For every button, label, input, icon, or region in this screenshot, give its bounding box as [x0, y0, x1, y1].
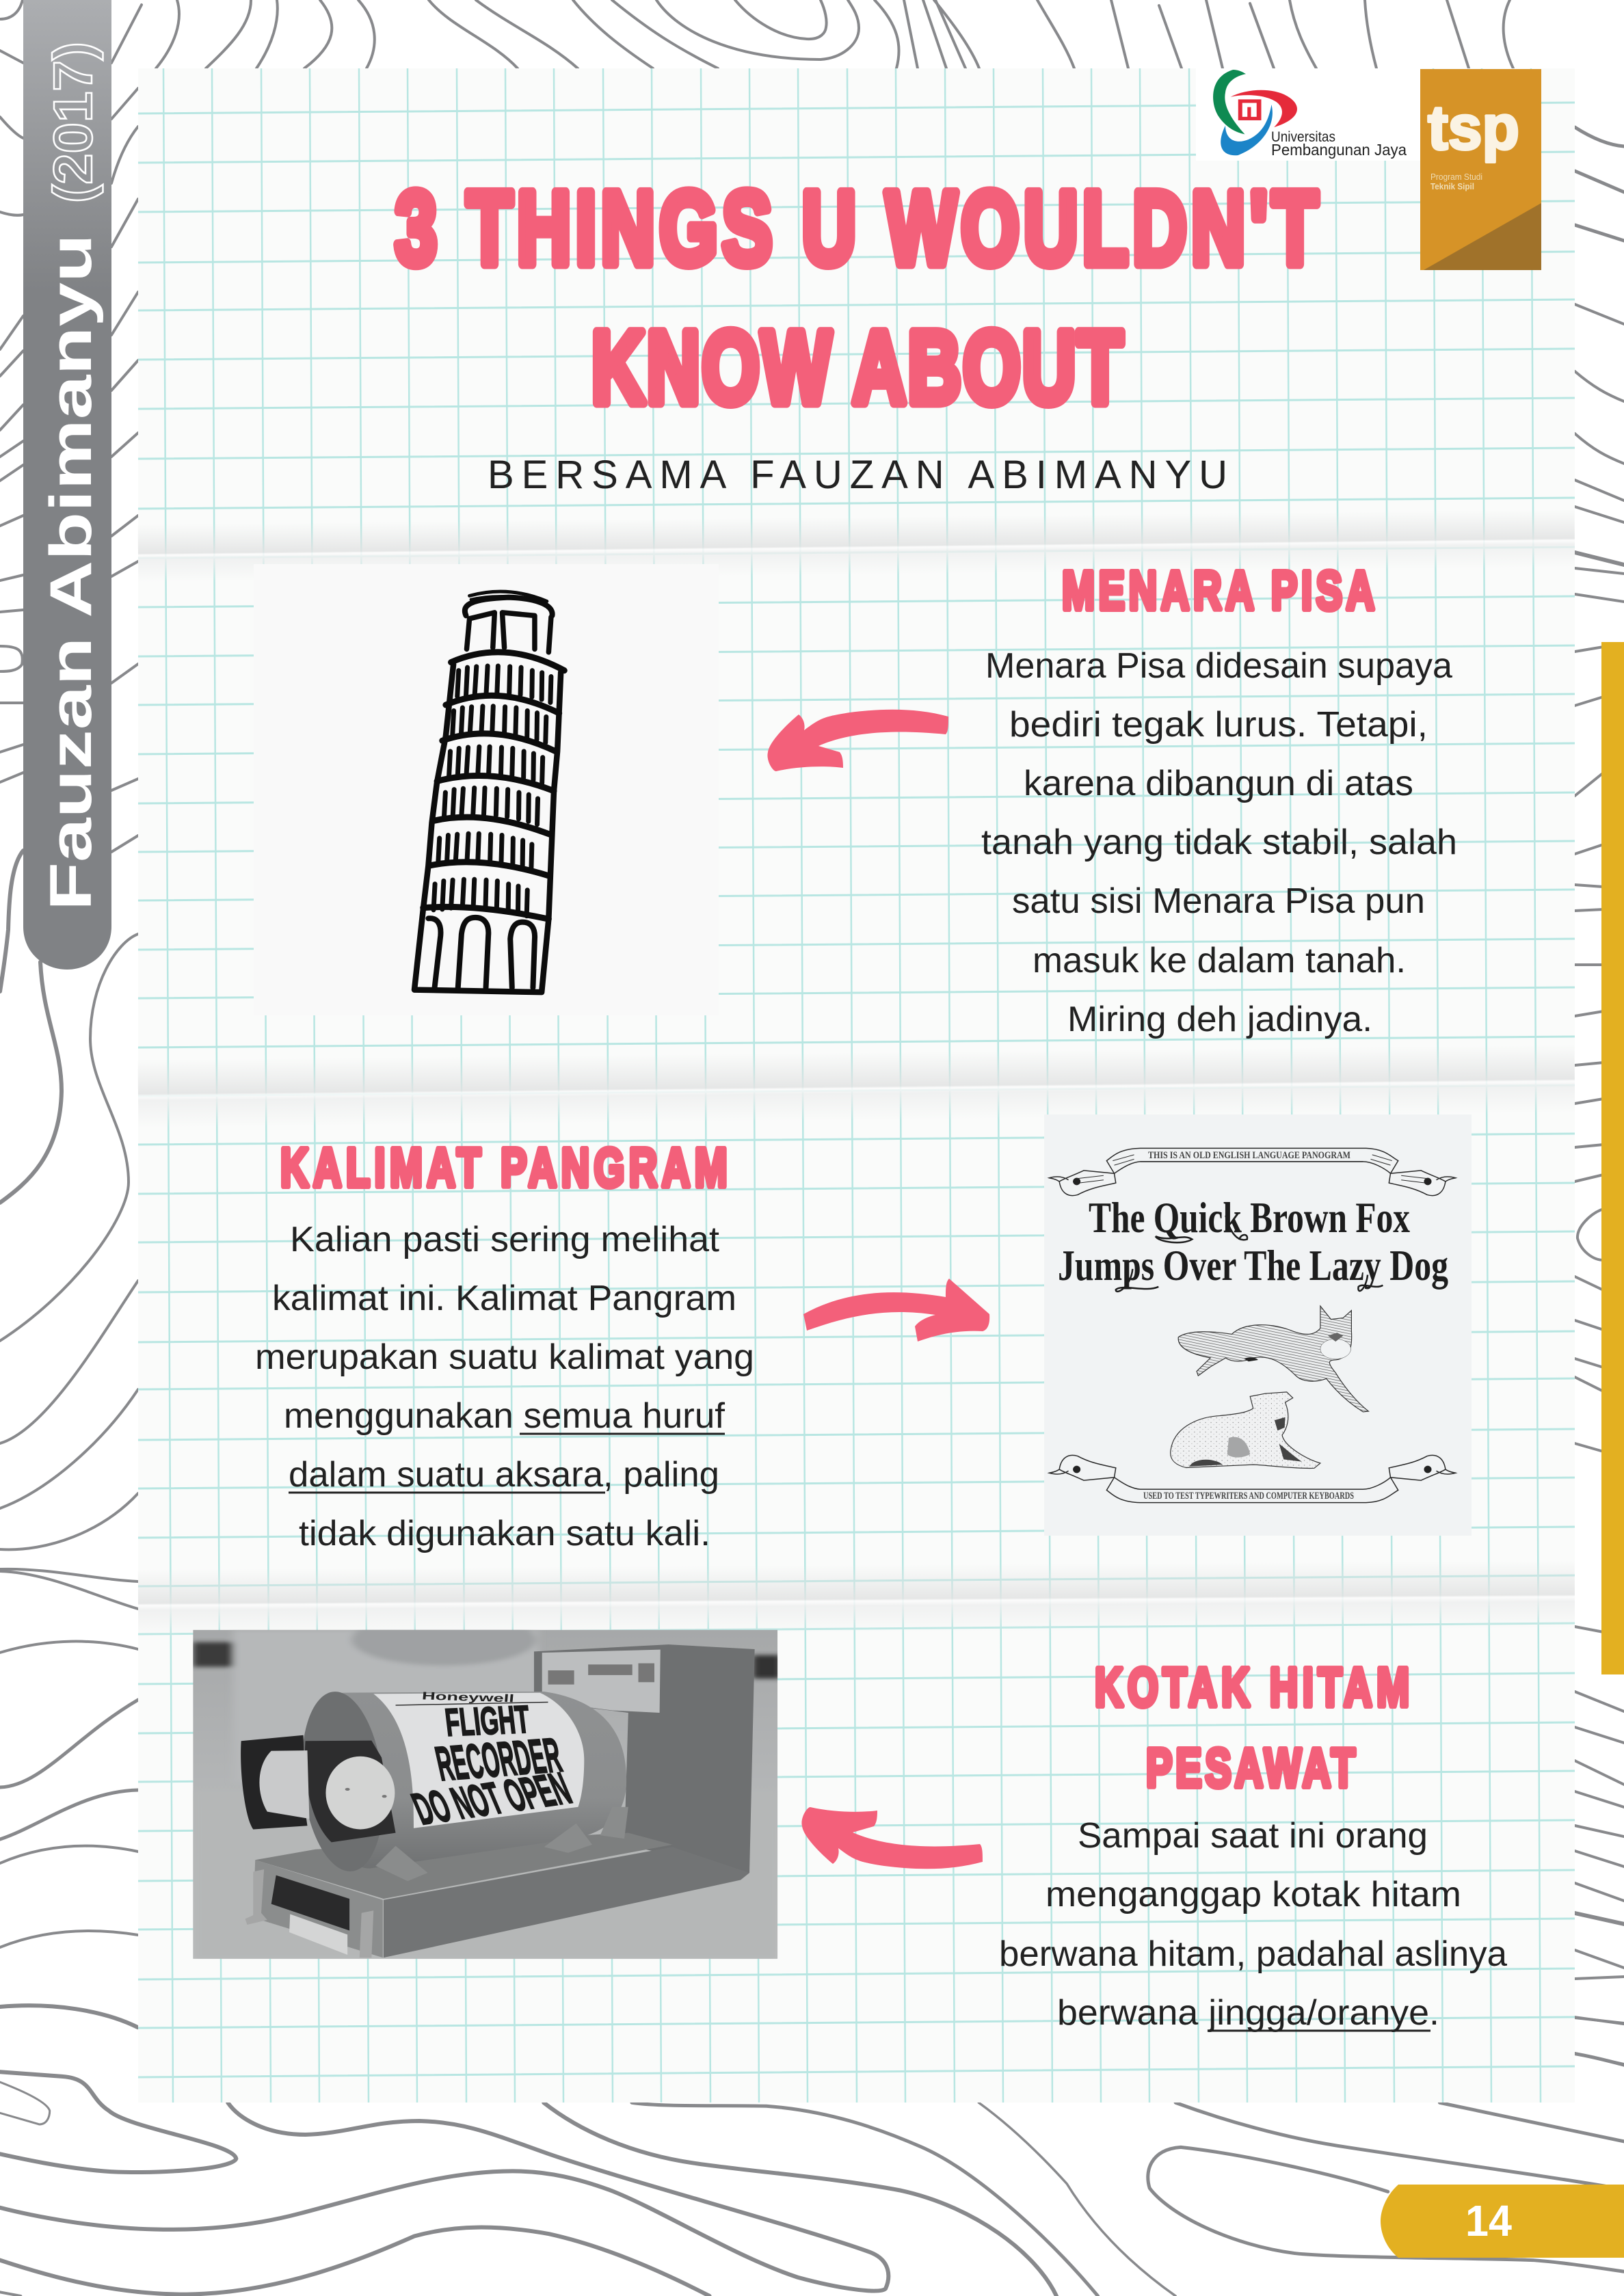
text: Menara Pisa: Menara Pisa didesain supaya [985, 646, 1452, 686]
text: Kalimat Pangram: tidak digunakan satu kali. [299, 1514, 710, 1553]
text: Kalimat Pangram: merupakan suatu kalimat yang [255, 1337, 754, 1377]
program studi: Program Studi [1430, 172, 1482, 182]
dog engraving [1171, 1392, 1320, 1469]
subtitle: BERSAMA FAUZAN ABIMANYU [488, 453, 1227, 497]
heading: Kalimat Pangram: KALIMAT PANGRAM [280, 1137, 728, 1198]
panel: flight recorder photo: DO NOT OPEN [405, 1763, 578, 1834]
heading: Menara Pisa: MENARA PISA [1062, 560, 1374, 621]
page number badge [1381, 2185, 1624, 2258]
ribbon text top: THIS IS AN OLD ENGLISH LANGUAGE PANOGRAM [1148, 1150, 1350, 1161]
teknik sipil: Teknik Sipil [1430, 181, 1474, 191]
text: Menara Pisa: bediri tegak lurus. Tetapi, [1009, 705, 1428, 745]
ribbon text bottom: USED TO TEST TYPEWRITERS AND COMPUTER KEYBOARDS [1143, 1491, 1354, 1501]
title: KNOW ABOUT [591, 310, 1123, 425]
yellow side bar [1601, 642, 1624, 1674]
text: Menara Pisa: karena dibangun di atas [1024, 764, 1413, 803]
heading: Kotak Hitam Pesawat: KOTAK HITAM [1095, 1657, 1409, 1718]
heading: Kotak Hitam Pesawat: PESAWAT [1146, 1737, 1355, 1798]
title: 3 THINGS U WOULDN'T [395, 170, 1318, 286]
text: Menara Pisa: Miring deh jadinya. [1067, 1000, 1372, 1039]
title [395, 170, 1318, 425]
panel: flight recorder photo [193, 1614, 781, 1960]
text: Kotak Hitam Pesawat: berwana hitam, padahal aslinya [999, 1934, 1507, 1974]
page number: 14 [1465, 2196, 1512, 2245]
recorder base [255, 1833, 672, 1899]
recorder label [373, 1693, 584, 1828]
recorder back box [534, 1644, 755, 1873]
tsp wordmark: tsp [1428, 93, 1519, 163]
logo text line 2: Pembangunan Jaya [1271, 141, 1407, 159]
fox engraving [1178, 1306, 1368, 1412]
sidebar year: (2017) [42, 42, 103, 203]
logo: TSP program badge [1420, 69, 1541, 270]
recorder cylinder [342, 1692, 626, 1868]
panel: flight recorder photo: RECORDER [431, 1728, 566, 1791]
text: Kalimat Pangram: Kalian pasti sering melihat [290, 1220, 720, 1259]
text: Kotak Hitam Pesawat [999, 1816, 1507, 2033]
recorder end cap [241, 1735, 307, 1829]
arrow: Kalimat Pangram pointing right [803, 1279, 989, 1341]
heading: Kotak Hitam Pesawat [1095, 1657, 1409, 1798]
text: Kalimat Pangram: dalam suatu aksara, paling [289, 1455, 719, 1495]
bottom ribbon [1049, 1455, 1456, 1503]
panel: flight recorder photo: Honeywell [421, 1690, 515, 1705]
pangram line 2: Jumps Over The Lazy Dog [1058, 1241, 1448, 1290]
arrow: Kotak Hitam pointing left [801, 1807, 983, 1869]
pangram line 1: The Quick Brown Fox [1089, 1193, 1410, 1242]
text: Kalimat Pangram [255, 1220, 754, 1553]
panel: pangram poster [1044, 1114, 1472, 1536]
text: Kotak Hitam Pesawat: Sampai saat ini orang [1078, 1816, 1428, 1856]
text: Menara Pisa: satu sisi Menara Pisa pun [1012, 881, 1425, 921]
logo: Universitas Pembangunan Jaya [1196, 68, 1420, 161]
sidebar name: Fauzan Abimanyu [38, 234, 104, 911]
sidebar tab [23, 0, 111, 970]
logo text: Universitas [1271, 129, 1335, 145]
text: Menara Pisa [981, 646, 1457, 1039]
text: Kotak Hitam Pesawat: berwana jingga/oranye. [1057, 1993, 1439, 2033]
panel: flight recorder photo: FLIGHT [443, 1697, 532, 1744]
text: Menara Pisa: tanah yang tidak stabil, salah [981, 823, 1457, 862]
panel: graph paper [137, 68, 1575, 2103]
text: Kalimat Pangram: kalimat ini. Kalimat Pangram [272, 1279, 736, 1318]
arrow: Menara Pisa pointing left [767, 710, 948, 771]
text: Menara Pisa: masuk ke dalam tanah. [1033, 941, 1406, 980]
panel: tower of Pisa illustration [254, 564, 719, 1015]
text: Kalimat Pangram: menggunakan semua huruf [284, 1396, 726, 1436]
pangram swashes [1116, 1216, 1383, 1292]
text: Kotak Hitam Pesawat: menganggap kotak hitam [1046, 1875, 1461, 1914]
top ribbon [1049, 1148, 1456, 1196]
